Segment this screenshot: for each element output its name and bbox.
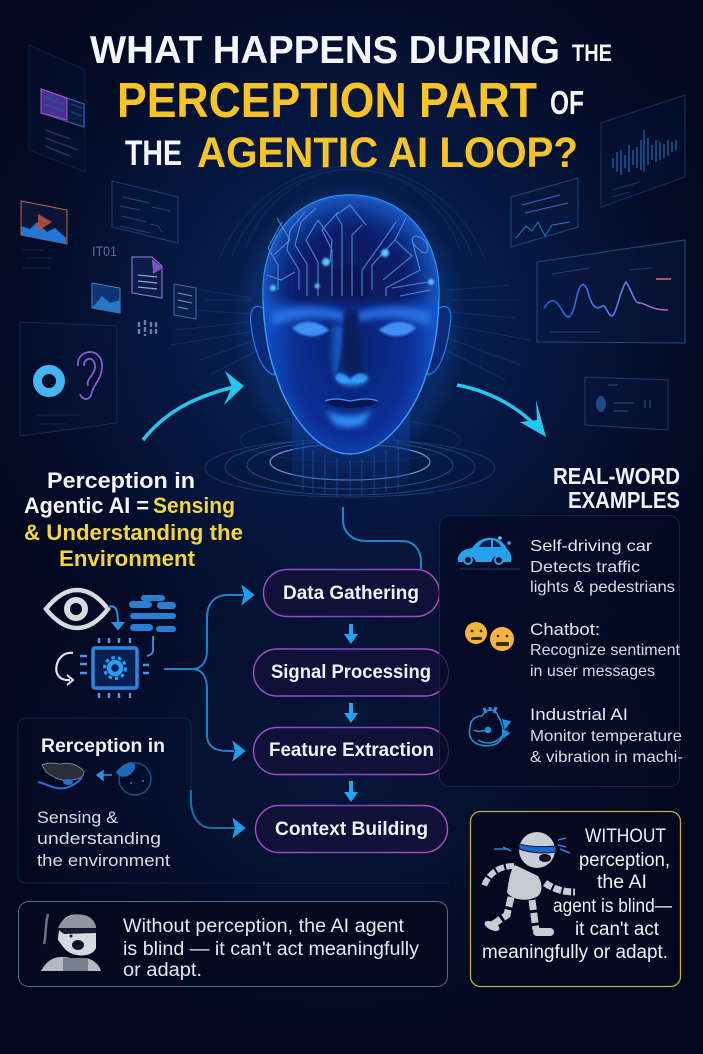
face xyxy=(263,195,439,454)
icon: database stack xyxy=(129,595,176,632)
callout text xyxy=(123,916,420,981)
example: self-driving car: Self-driving car xyxy=(530,538,653,555)
panel: waveform screen top right xyxy=(601,95,685,207)
panel: examples xyxy=(440,516,683,786)
panel: video screen xyxy=(21,201,67,268)
arrow: input to head xyxy=(143,371,244,440)
panel: small screen lower right xyxy=(585,377,668,430)
connector: chip to process steps xyxy=(164,587,253,836)
example: industrial ai: Monitor temperature xyxy=(530,728,682,745)
callout text: meaningfully or adapt. xyxy=(482,942,668,963)
step: feature extraction: Feature Extraction xyxy=(269,740,434,761)
icons: floating data files xyxy=(92,243,196,336)
panel: chart screen upper left xyxy=(112,181,178,243)
callout: blind agent bottom xyxy=(18,902,448,986)
example: chatbot: in user messages xyxy=(530,663,655,680)
example: industrial ai xyxy=(469,705,683,766)
nose bridge shadow xyxy=(337,312,362,372)
icon: brain and face xyxy=(38,762,151,795)
icon: emoji faces xyxy=(465,622,514,651)
heading: perception definition: & Understanding the xyxy=(24,520,243,545)
callout text: agent is blind— xyxy=(553,896,672,917)
title: THE xyxy=(572,40,612,67)
callout text: WITHOUT xyxy=(585,826,666,847)
heading: perception definition: Perception in xyxy=(47,468,195,493)
example: chatbot: Chatbot: xyxy=(530,620,600,639)
heading: perception definition xyxy=(24,468,243,571)
circuit lines xyxy=(267,205,430,296)
callout: without perception xyxy=(470,812,680,986)
step: feature extraction xyxy=(254,728,448,774)
title: AGENTIC AI LOOP? xyxy=(197,129,578,177)
arrow: head to examples xyxy=(457,385,546,437)
title: THE xyxy=(125,134,182,173)
icon: car xyxy=(458,536,520,569)
example: chatbot xyxy=(465,620,681,680)
step: data gathering xyxy=(264,570,440,616)
example: self-driving car xyxy=(458,536,675,596)
step: signal processing xyxy=(254,649,448,696)
panel: document screen top left xyxy=(29,45,85,172)
step: signal processing: Signal Processing xyxy=(271,662,431,683)
example: self-driving car: Detects traffic xyxy=(530,559,640,576)
callout text: the AI xyxy=(597,872,647,893)
nose xyxy=(335,373,368,383)
heading: perception definition: Environment xyxy=(59,546,196,571)
panel body: the environment xyxy=(37,851,170,870)
title: WHAT HAPPENS DURING xyxy=(90,29,560,72)
radial lines around head xyxy=(170,166,530,380)
heading: perception definition: Agentic AI = xyxy=(24,493,149,518)
icon: blindfolded robot xyxy=(483,832,575,936)
panel body xyxy=(37,808,170,870)
icons: floating data files: IT01 xyxy=(92,243,117,259)
brow glow xyxy=(272,307,430,427)
arrow: step 2 to 3 xyxy=(344,703,358,723)
eyes xyxy=(292,322,329,336)
panel body: understanding xyxy=(37,829,161,848)
icon: connector eye to chip xyxy=(108,606,153,656)
icon: blindfolded person xyxy=(41,914,101,971)
ears xyxy=(251,306,451,375)
callout text: Without perception, the AI agent xyxy=(123,916,405,937)
arrow: step 3 to 4 xyxy=(344,781,358,802)
concentric rings under head xyxy=(205,418,495,497)
icon: machine gear xyxy=(469,707,510,746)
panel: signal chart screen right xyxy=(537,240,685,343)
panel body: Sensing & xyxy=(37,808,119,827)
glowing nodes xyxy=(270,249,434,291)
heading: real-word examples xyxy=(553,463,680,513)
title: OF xyxy=(550,84,584,121)
panel: audio screen with ring and ear xyxy=(20,322,117,436)
step: context building: Context Building xyxy=(275,819,428,840)
icon: eye xyxy=(46,590,108,628)
connector: head to data gathering xyxy=(343,507,421,569)
icon: processor chip xyxy=(56,638,149,698)
panel: line chart screen right xyxy=(511,178,578,247)
neck xyxy=(292,405,410,497)
heading: perception definition: Sensing xyxy=(153,493,235,518)
example: industrial ai: & vibration in machi- xyxy=(530,749,683,766)
example: self-driving car: lights & pedestrians xyxy=(530,579,675,596)
callout text: or adapt. xyxy=(123,960,202,981)
arrow: step 1 to 2 xyxy=(344,624,358,644)
callout text: is blind — it can't act meaningfully xyxy=(123,939,420,960)
callout text xyxy=(482,826,672,963)
callout text: perception, xyxy=(579,850,670,871)
step: context building xyxy=(256,806,448,852)
step: data gathering: Data Gathering xyxy=(283,583,419,604)
callout text: it can't act xyxy=(575,919,660,940)
heading: real-word examples: EXAMPLES xyxy=(568,487,680,513)
heading: real-word examples: REAL-WORD xyxy=(553,463,680,489)
title: PERCEPTION PART xyxy=(117,74,537,128)
head with circuit brain xyxy=(242,190,458,497)
panel: perception summary xyxy=(18,718,449,883)
mouth xyxy=(325,400,378,408)
panel heading: Rerception in xyxy=(41,736,165,757)
example: industrial ai: Industrial AI xyxy=(530,705,628,724)
example: chatbot: Recognize sentiment xyxy=(530,642,681,659)
title xyxy=(90,29,612,177)
